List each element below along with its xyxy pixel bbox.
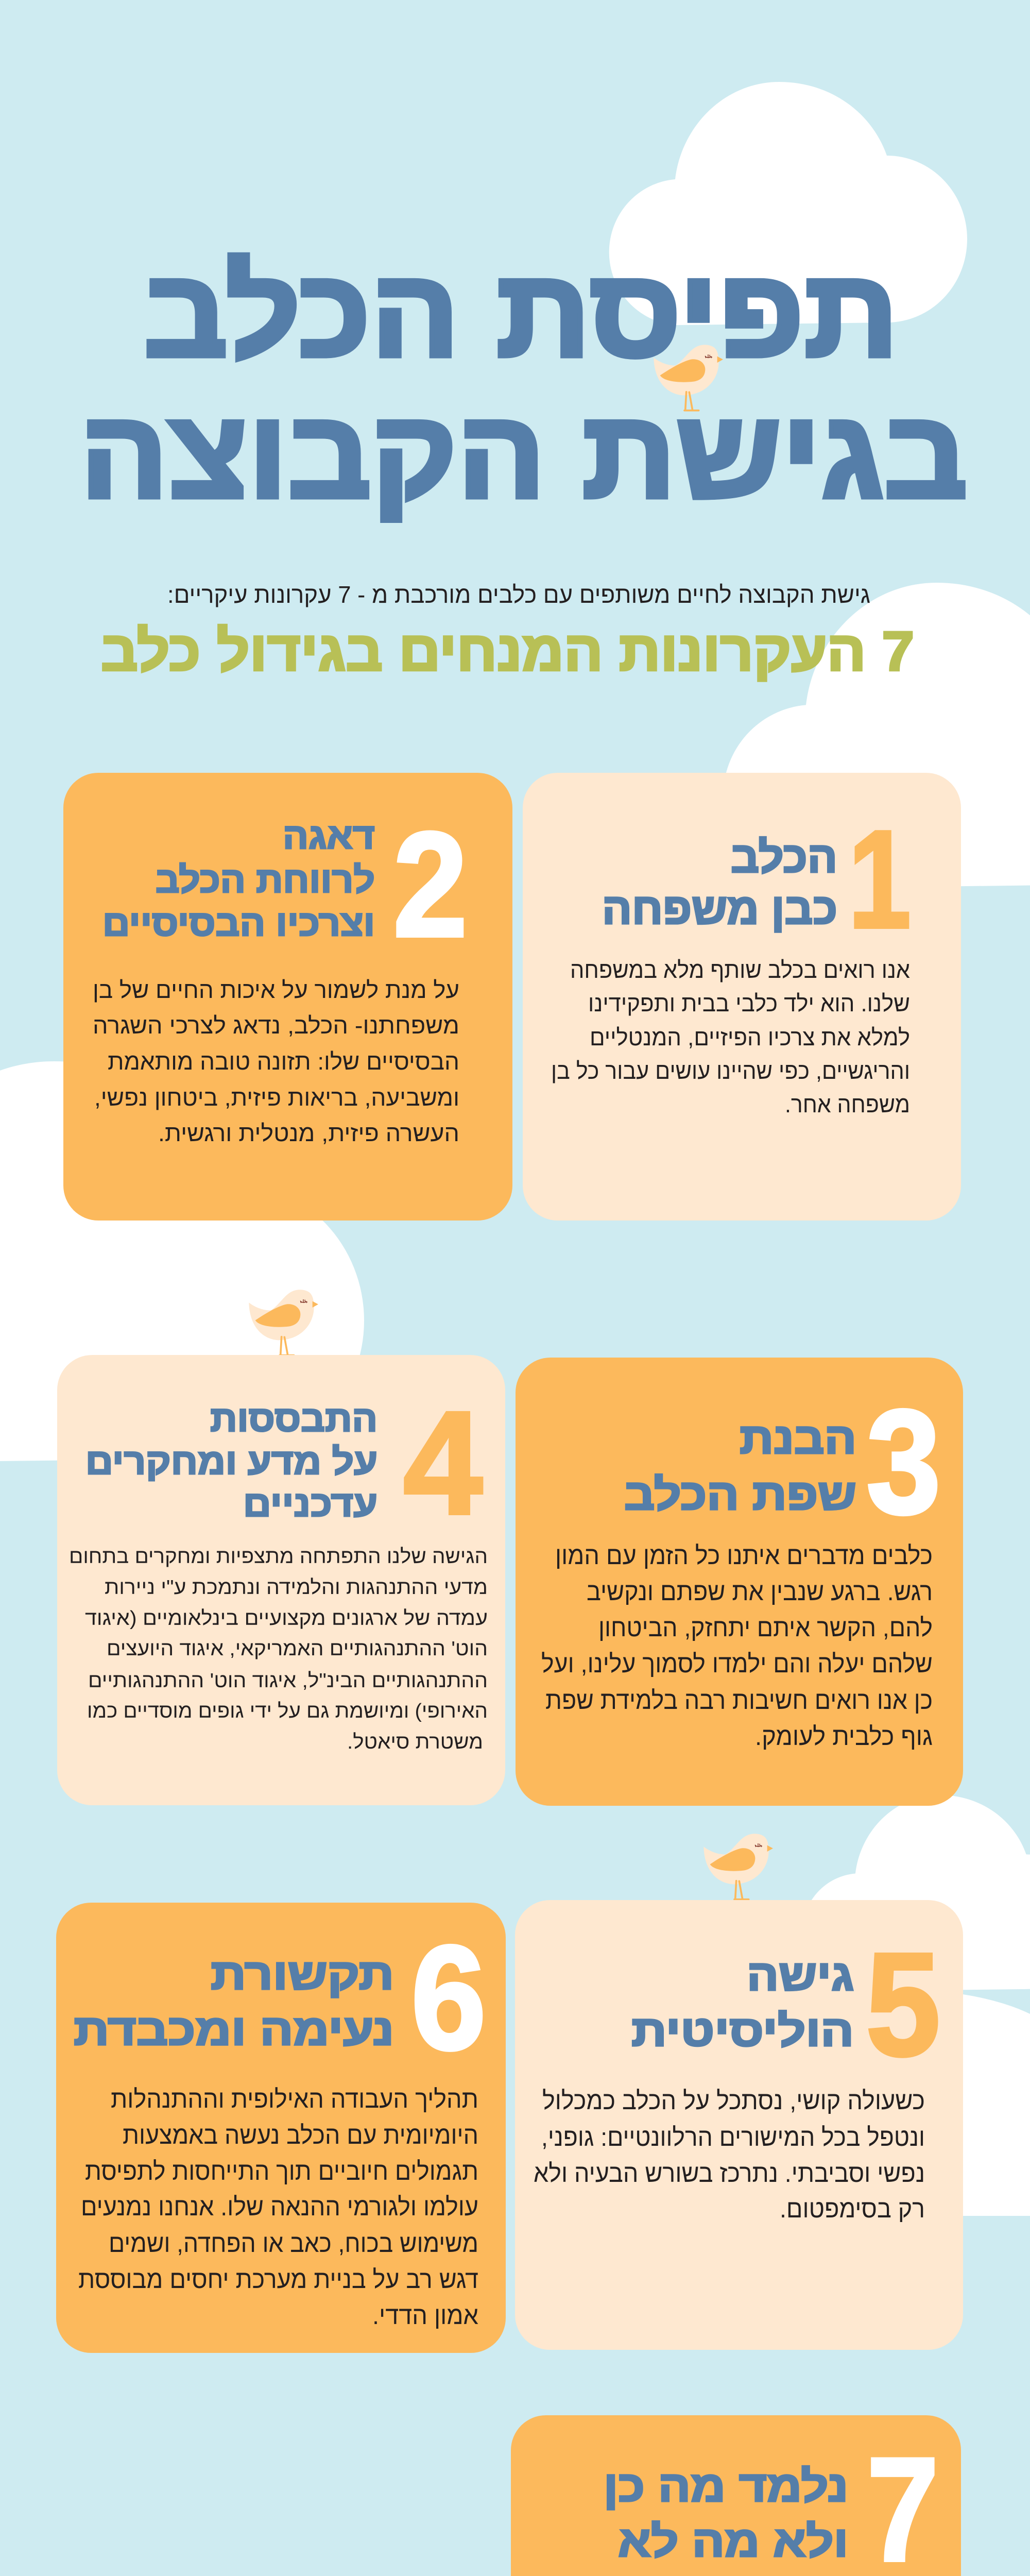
card 4 text: האירופי) ומיושמת גם על ידי גופים מוסדיים כמו [87, 1700, 488, 1722]
card 2 text: ומשביעה, בריאות פיזית, ביטחון נפשי, [94, 1084, 459, 1111]
card 1 text: למלא את צרכיו הפיזיים, המנטליים [590, 1024, 910, 1050]
panel: principle 3 [516, 1358, 963, 1806]
card 3 heading [624, 1414, 856, 1519]
card 4 heading [85, 1399, 377, 1524]
number 2: 2 [393, 801, 468, 968]
panel: principle 7 [511, 2415, 961, 2576]
card 6 heading: נעימה ומכבדת [74, 2006, 394, 2054]
card 4 text: ההתנהגותיים הבינ"ל, איגוד הוט' ההתנהגותיים [88, 1670, 488, 1692]
card 6 text: תהליך העבודה האילופית וההתנהלות [111, 2086, 478, 2113]
card 6 text: דגש רב על בניית מערכת יחסים מבוססת [78, 2266, 478, 2294]
card 4 heading: עדכניים [243, 1484, 377, 1524]
panel: principle 5 [515, 1900, 963, 2350]
card 5 text: כשעולה קושי, נסתכל על הכלב כמכלול [542, 2087, 925, 2115]
card 2 heading [102, 816, 375, 943]
card 6 text: משימוש בכוח, כאב או הפחדה, ושמים [109, 2230, 478, 2258]
cloud: right upper [802, 1795, 1030, 1991]
card 2 text: הבסיסיים שלו: תזונה טובה מותאמת [108, 1048, 459, 1075]
cloud: right lower [917, 1991, 1030, 2216]
card 5 background [515, 1900, 963, 2350]
card 3 text: כלבים מדברים איתנו כל הזמן עם המון [555, 1542, 933, 1570]
card 6 text: עולמו ולגורמי ההנאה שלו. אנחנו נמנעים [81, 2193, 478, 2221]
number 1: 1 [848, 802, 911, 957]
card 2 background [63, 773, 512, 1221]
card 1 background [523, 773, 961, 1221]
card 4 text: עמדה של ארגונים מקצועיים בינלאומיים (איגוד [85, 1607, 488, 1630]
card 4 text: מדעי ההתנהגות והלמידה ונתמכת ע"י ניירות [105, 1577, 488, 1599]
cloud: top [609, 82, 967, 325]
panel: principle 6 [56, 1903, 506, 2353]
card 7 background [511, 2415, 961, 2576]
card 4 heading: התבססות [210, 1399, 377, 1439]
card 3 heading: שפת הכלב [624, 1470, 856, 1519]
subtitle: 7 העקרונות המנחים בגידול כלב [101, 620, 914, 682]
panel: principle 4 [57, 1355, 505, 1805]
card 1 heading: הכלב [731, 833, 837, 882]
card 5 heading [631, 1951, 854, 2055]
card 3 text: להם, הקשר איתם יתחזק, הביטחון [598, 1614, 933, 1642]
card 6 text: תגמולים חיוביים תוך התייחסות לתפיסת [85, 2158, 478, 2185]
title: בגישת הקבוצה [80, 385, 968, 524]
card 4 text: הוט' ההתנהגותיים האמריקאי, איגוד היועצים [107, 1638, 488, 1660]
number 3: 3 [866, 1379, 941, 1545]
card 5 text: נפשי וסביבתי. נתרכז בשורש הבעיה ולא [534, 2160, 925, 2188]
title: תפיסת הכלב [144, 244, 899, 383]
card 3 text: גוף כלבית לעומק. [755, 1723, 933, 1751]
intro sentence: גישת הקבוצה לחיים משותפים עם כלבים מורכבת מ - 7 עקרונות עיקריים: [167, 581, 870, 608]
card 6 heading: תקשורת [211, 1950, 394, 1998]
card 1 text: משפחה אחר. [785, 1091, 910, 1117]
card 2 text [93, 977, 459, 1146]
card 1 text [551, 957, 910, 1117]
icon: bird on title [654, 345, 723, 411]
card 1 text: אנו רואים בכלב שותף מלא במשפחה [570, 957, 910, 983]
card 1 text: שלנו. הוא ילד כלבי בבית ותפקידינו [588, 990, 910, 1016]
card 4 text: משטרת סיאטל. [347, 1731, 483, 1753]
card 2 text: העשרה פיזית, מנטלית ורגשית. [158, 1120, 459, 1146]
card 6 text: אמון הדדי. [372, 2302, 478, 2330]
card 2 text: משפחתנו- הכלב, נדאג לצרכי השגרה [93, 1012, 459, 1039]
number 4: 4 [403, 1381, 484, 1545]
card 6 text: היומיומית עם הכלב נעשה באמצעות [123, 2122, 478, 2149]
card 5 heading: הוליסיטית [631, 2007, 854, 2055]
card 7 heading: ולא מה לא [618, 2517, 848, 2566]
card 1 text: והריגשיים, כפי שהיינו עושים עבור כל בן [551, 1058, 910, 1084]
card 5 heading: גישה [747, 1951, 854, 1999]
card 3 heading: הבנת [740, 1414, 856, 1463]
number 6: 6 [411, 1915, 486, 2081]
card 4 text: הגישה שלנו התפתחה מתצפיות ומחקרים בתחום [69, 1546, 488, 1568]
card 5 text [534, 2087, 925, 2223]
number 5: 5 [866, 1923, 940, 2087]
card 3 background [516, 1358, 963, 1806]
card 3 text: כן אנו רואים חשיבות רבה בלמידת שפת [545, 1687, 933, 1715]
panel: principle 1 [523, 773, 961, 1221]
card 2 heading: דאגה [283, 816, 375, 856]
card 1 heading: כבן משפחה [602, 885, 837, 933]
card 5 text: רק בסימפטום. [780, 2195, 925, 2223]
card 7 heading [604, 2462, 848, 2566]
icon: bird on card 5 [703, 1834, 773, 1900]
card 1 heading [602, 833, 837, 933]
cloud: left [0, 1061, 364, 1463]
card 3 text: רגש. ברגע שנבין את שפתם ונקשיב [587, 1578, 933, 1606]
card 5 text: ונטפל בכל המישורים הרלוונטיים: גופני, [541, 2124, 925, 2151]
card 3 text [541, 1542, 933, 1751]
card 4 background [57, 1355, 505, 1805]
card 2 heading: לרווחת הכלב [156, 860, 375, 900]
card 2 heading: וצרכיו הבסיסיים [102, 903, 375, 943]
card 6 text [78, 2086, 478, 2330]
icon: bird on card 4 [249, 1290, 318, 1355]
title [80, 244, 968, 524]
card 7 heading: נלמד מה כן [604, 2462, 848, 2511]
card 2 text: על מנת לשמור על איכות החיים של בן [93, 977, 459, 1003]
card 6 background [56, 1903, 506, 2353]
card 3 text: שלהם יעלה והם ילמדו לסמוך עלינו, ועל [541, 1650, 933, 1678]
panel: principle 2 [63, 773, 512, 1221]
card 4 heading: על מדע ומחקרים [85, 1442, 377, 1482]
card 6 heading [74, 1950, 394, 2054]
cloud: behind card 1 [723, 583, 1030, 888]
card 4 text [69, 1546, 488, 1753]
